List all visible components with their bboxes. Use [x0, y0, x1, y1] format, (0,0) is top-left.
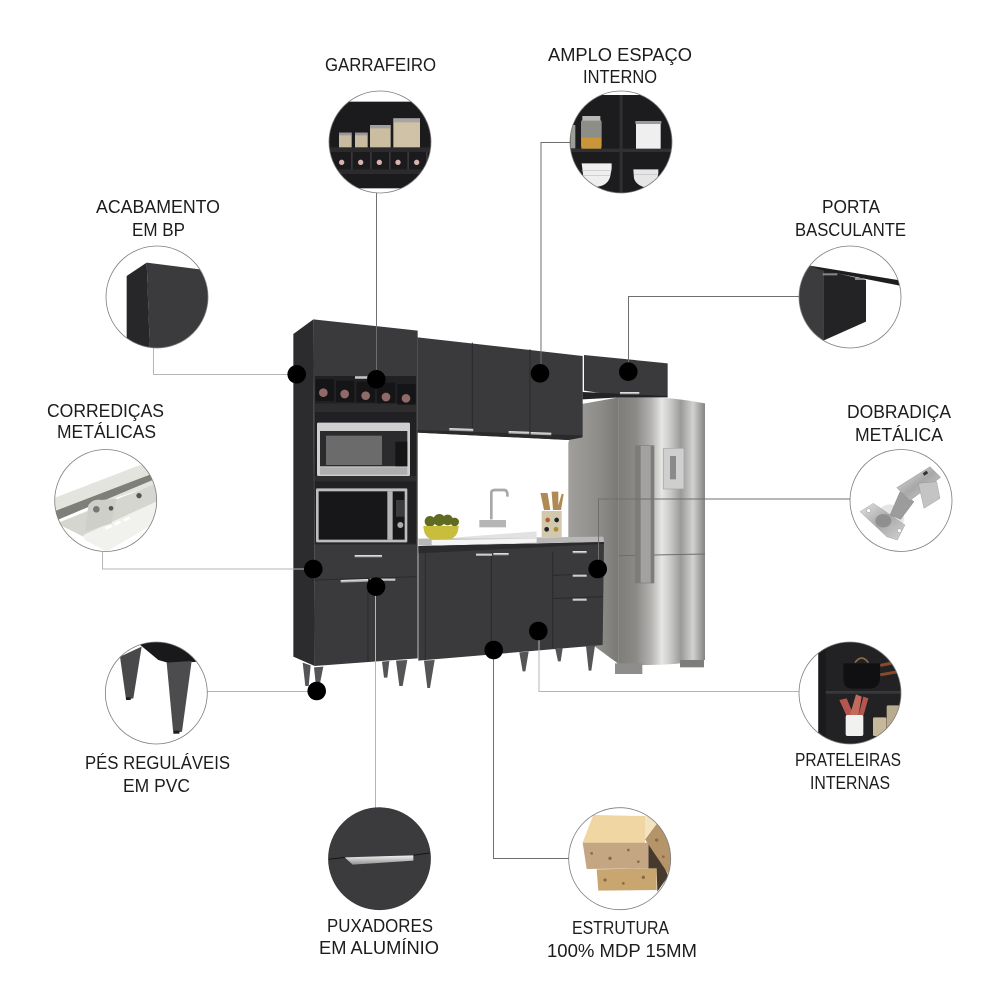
refrigerator [568, 397, 705, 674]
icon: wine rack close-up [327, 102, 433, 188]
heading: acabamento em BP: EM BP [132, 220, 185, 240]
icon: drawer slide [53, 465, 160, 552]
heading: amplo espaço interno [548, 45, 692, 87]
heading: pés reguláveis em PVC: EM PVC [123, 776, 190, 796]
marker dots [287, 362, 638, 700]
heading: prateleiras internas [795, 750, 901, 793]
icon: cabinet corner [126, 262, 208, 348]
heading: corrediças metálicas: CORREDIÇAS [47, 401, 164, 421]
sink area with faucet, fruit and utensils [418, 490, 604, 545]
heading: corrediças metálicas [47, 401, 164, 442]
heading: puxadores em alumínio: PUXADORES [327, 916, 433, 936]
kitchen illustration [293, 319, 705, 688]
upper microwave [317, 423, 410, 476]
heading: pés reguláveis em PVC: PÉS REGULÁVEIS [85, 753, 230, 773]
icon: interior shelf [818, 640, 906, 747]
callout: dobradiça metálica [847, 402, 952, 552]
heading: acabamento em BP [96, 197, 220, 240]
heading: prateleiras internas: INTERNAS [810, 773, 890, 793]
icon: particle board layers [583, 815, 672, 892]
upper cabinets [418, 337, 668, 440]
heading: porta basculante: PORTA [822, 197, 880, 217]
connector lines [102, 142, 850, 858]
wine rack [316, 379, 416, 405]
icon: adjustable feet [120, 640, 200, 734]
heading: garrafeiro: GARRAFEIRO [325, 55, 436, 75]
heading: puxadores em alumínio: EM ALUMÍNIO [319, 938, 439, 958]
callout: acabamento em BP [96, 197, 220, 353]
icon: aluminium handle [327, 807, 433, 913]
heading: corrediças metálicas: METÁLICAS [57, 422, 156, 442]
lower microwave [316, 488, 407, 542]
tall oven unit [293, 319, 418, 666]
cabinet legs [303, 645, 595, 688]
callout: pés reguláveis em PVC [85, 640, 230, 796]
heading: estrutura MDP [547, 918, 697, 961]
icon: lift-up door [797, 265, 902, 342]
callout: prateleiras internas [795, 640, 906, 793]
heading: dobradiça metálica: DOBRADIÇA [847, 402, 951, 422]
heading: estrutura MDP: 100% MDP 15MM [547, 941, 697, 961]
callout: corrediças metálicas [47, 401, 164, 552]
heading: amplo espaço interno: AMPLO ESPAÇO [548, 45, 692, 65]
heading: amplo espaço interno: INTERNO [583, 67, 657, 87]
callout: garrafeiro [325, 55, 436, 193]
base cabinet [418, 542, 604, 661]
callout: porta basculante [795, 197, 906, 348]
heading: porta basculante [795, 197, 906, 240]
heading: acabamento em BP: ACABAMENTO [96, 197, 220, 217]
callout: estrutura MDP [547, 808, 697, 961]
icon: metal hinge [860, 467, 941, 540]
heading: porta basculante: BASCULANTE [795, 220, 906, 240]
callout: amplo espaço interno [548, 45, 692, 195]
heading: pés reguláveis em PVC [85, 753, 230, 796]
heading: prateleiras internas: PRATELEIRAS [795, 750, 901, 770]
callout: puxadores em alumínio [319, 807, 439, 958]
heading: puxadores em alumínio [319, 916, 439, 958]
heading: dobradiça metálica [847, 402, 951, 445]
icon: interior shelves [568, 95, 675, 195]
heading: estrutura MDP: ESTRUTURA [572, 918, 669, 938]
heading: dobradiça metálica: METÁLICA [855, 425, 943, 445]
